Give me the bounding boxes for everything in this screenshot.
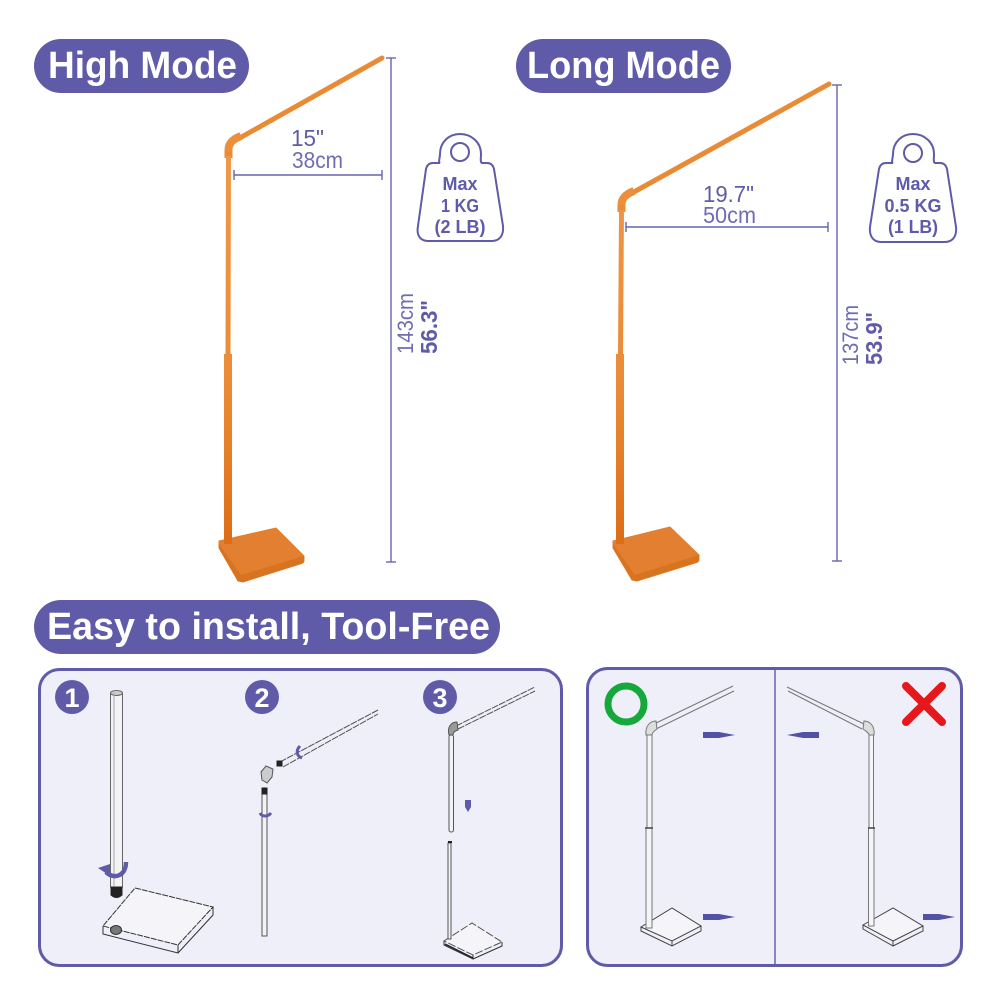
step 3 down arrow <box>465 800 471 812</box>
step 3 badge <box>423 680 457 714</box>
panel: installation steps <box>40 670 562 966</box>
lamp: long mode <box>613 84 829 581</box>
panel: correct vs wrong balance <box>588 668 962 966</box>
heading: Long Mode: Long Mode <box>527 45 720 87</box>
dimension: high mode reach line <box>234 170 382 180</box>
icon: green circle correct <box>608 686 644 722</box>
step 1 badge: 1 <box>64 683 80 713</box>
correct lamp illustration <box>641 686 734 946</box>
label: 137cm 53.9 inch: 137cm <box>838 305 863 365</box>
label: 143cm 56.3 inch: 143cm <box>393 293 418 354</box>
weight icon: max 1 KG <box>418 134 503 241</box>
label: 15 inch 38cm: 38cm <box>292 147 343 173</box>
weight icon: max 0.5 KG: (1 LB) <box>888 217 938 237</box>
step 3 badge: 3 <box>432 683 448 713</box>
step 2 illustration: poles and elbow <box>261 710 378 936</box>
label: 137cm 53.9 inch: 53.9" <box>861 312 887 365</box>
weight icon: max 1 KG: Max <box>442 174 478 194</box>
label: 15 inch 38cm <box>291 125 343 173</box>
heading: Easy to install, Tool-Free: Easy to install, Tool-Free <box>47 606 490 648</box>
weight icon: max 0.5 KG: Max <box>896 174 930 194</box>
step 1 illustration: pole and base <box>103 690 213 953</box>
icon: red cross wrong <box>906 686 942 722</box>
arrow: right upper <box>703 732 735 738</box>
weight icon: max 0.5 KG <box>870 134 956 242</box>
label: 19.7 inch 50cm: 19.7" <box>703 181 754 207</box>
weight icon: max 1 KG: (2 LB) <box>434 217 486 237</box>
dimension: high mode height line <box>386 58 396 562</box>
dimension: long mode reach line <box>626 222 828 232</box>
step 2 badge <box>245 680 279 714</box>
arrow: left upper <box>787 732 819 738</box>
label: 143cm 56.3 inch: 56.3" <box>416 300 442 354</box>
label: 19.7 inch 50cm <box>703 181 756 228</box>
heading: High Mode: High Mode <box>48 45 237 87</box>
step 2 rotation arrows <box>260 746 302 816</box>
step 1 rotation arrow <box>98 862 126 876</box>
label: 15 inch 38cm: 15" <box>291 125 324 151</box>
arrow: right lower <box>703 914 735 920</box>
dimension: long mode height line <box>832 85 842 561</box>
step 3 illustration: assembled lamp parts <box>444 687 535 959</box>
arrow: right base <box>923 914 955 920</box>
step 1 badge <box>55 680 89 714</box>
weight icon: max 0.5 KG: 0.5 KG <box>884 196 942 216</box>
label: 137cm 53.9 inch <box>838 305 887 365</box>
label: 19.7 inch 50cm: 50cm <box>703 202 756 228</box>
lamp: high mode <box>219 58 382 582</box>
label: 143cm 56.3 inch <box>393 293 442 354</box>
step 2 badge: 2 <box>254 683 270 713</box>
weight icon: max 1 KG: 1 KG <box>441 196 479 216</box>
wrong lamp illustration <box>787 687 923 946</box>
